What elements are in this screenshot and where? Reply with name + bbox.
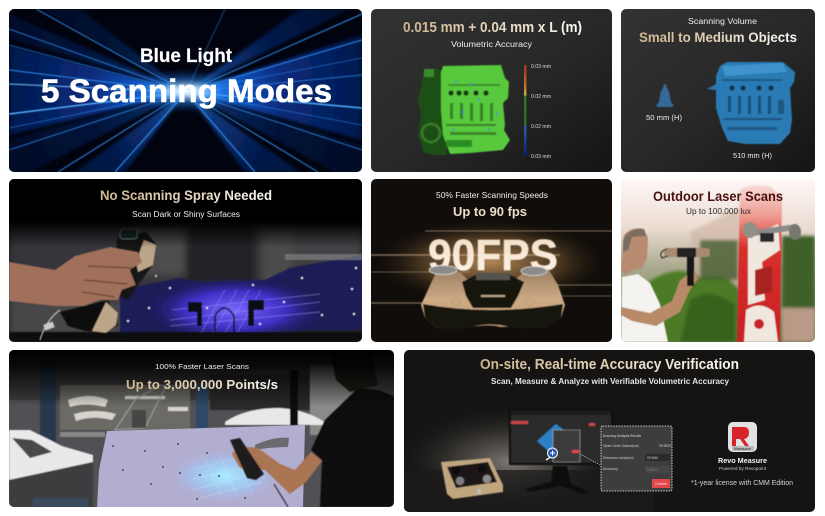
- subheading: 50% Faster Scanning Speeds: [436, 191, 548, 200]
- car door: [97, 425, 305, 507]
- top fade: [9, 179, 362, 246]
- panel: blue light scanning modes: [9, 9, 362, 172]
- accuracy results dialog: 0.0017: [647, 468, 658, 472]
- accuracy results dialog: Reference value(mm): [603, 456, 634, 460]
- panel: faster laser scans: [9, 350, 394, 507]
- subheading: Scan Dark or Shiny Surfaces: [132, 210, 240, 219]
- light rays: [9, 9, 362, 172]
- subheading: Scanning Volume: [688, 17, 758, 26]
- panel: 90 fps: [371, 179, 612, 342]
- subheading: Up to 100,000 lux: [686, 207, 751, 216]
- heading: Outdoor Laser Scans: [653, 189, 783, 204]
- man holding scanner: [621, 228, 710, 342]
- blurred background foliage: [648, 205, 815, 342]
- colour legend: 0.03 mm: [531, 64, 551, 70]
- heading: Small to Medium Objects: [639, 30, 797, 45]
- icon: Revo Measure app: [728, 422, 757, 452]
- sphere calibration case: [441, 458, 503, 499]
- monitor: [509, 408, 613, 494]
- top fade: [9, 350, 394, 507]
- heading: On-site, Real-time Accuracy Verification: [480, 357, 739, 373]
- colour legend: [524, 64, 551, 160]
- label: small object: 50 mm (H): [646, 113, 682, 122]
- accuracy results dialog: 99.9846: [647, 456, 658, 460]
- accuracy results dialog: 99.9829: [659, 444, 671, 448]
- app name: Revo Measure: [718, 456, 767, 465]
- icon: small blue bell model: [656, 84, 674, 107]
- colour legend: 0.02 mm: [531, 94, 551, 100]
- accuracy results dialog: [580, 426, 672, 491]
- blurred workshop background: [9, 350, 394, 507]
- heading: Up to 90 fps: [453, 204, 527, 219]
- person with scanner: [230, 350, 394, 507]
- icon: magnifier: [546, 448, 558, 460]
- accuracy results dialog: Accuracy: [603, 467, 618, 471]
- handheld scanner: [40, 229, 156, 340]
- subheading: Scan, Measure & Analyze with Verifiable Volumetric Accuracy: [491, 376, 729, 386]
- blue-lit car part: [9, 254, 362, 344]
- blue engine model: [707, 62, 795, 144]
- blurred workshop background: [9, 222, 362, 342]
- large 90FPS: 90FPS: [428, 231, 558, 280]
- heading: No Scanning Spray Needed: [100, 187, 272, 203]
- license note: *1-year license with CMM Edition: [691, 480, 793, 487]
- accuracy results dialog: Accuracy Analysis Results: [603, 434, 641, 438]
- panel: no scanning spray: [9, 179, 362, 344]
- panel: scanning volume: [621, 9, 815, 172]
- accuracy results dialog: Sphere Center Distance(mm): [603, 444, 639, 448]
- panel: outdoor laser scans: [621, 179, 815, 342]
- accuracy results dialog: Confirm: [655, 482, 667, 486]
- speed streaks: [371, 231, 612, 303]
- green engine model: [418, 65, 510, 155]
- colour legend: 0.02 mm: [531, 124, 551, 130]
- panel: volumetric accuracy: [371, 9, 612, 172]
- label: medium object: 510 mm (H): [733, 151, 772, 160]
- heading: 0.015 mm + 0.04 mm x L (m): [403, 20, 582, 36]
- heading: Up to 3,000,000 Points/s: [126, 377, 278, 392]
- panel: accuracy verification: [390, 350, 815, 516]
- icon: Revo Measure app: Measure: [734, 447, 751, 451]
- colour legend: 0.03 mm: [531, 154, 551, 160]
- scanner device: [421, 266, 565, 329]
- heading: Blue Light: [140, 46, 233, 67]
- powered by: Powered by Revopoint: [719, 466, 767, 472]
- subheading: 100% Faster Laser Scans: [155, 362, 249, 371]
- subheading: Volumetric Accuracy: [451, 39, 533, 49]
- skateboard: [737, 185, 801, 342]
- main title: 5 Scanning Modes: [41, 73, 332, 109]
- hand: [9, 247, 142, 306]
